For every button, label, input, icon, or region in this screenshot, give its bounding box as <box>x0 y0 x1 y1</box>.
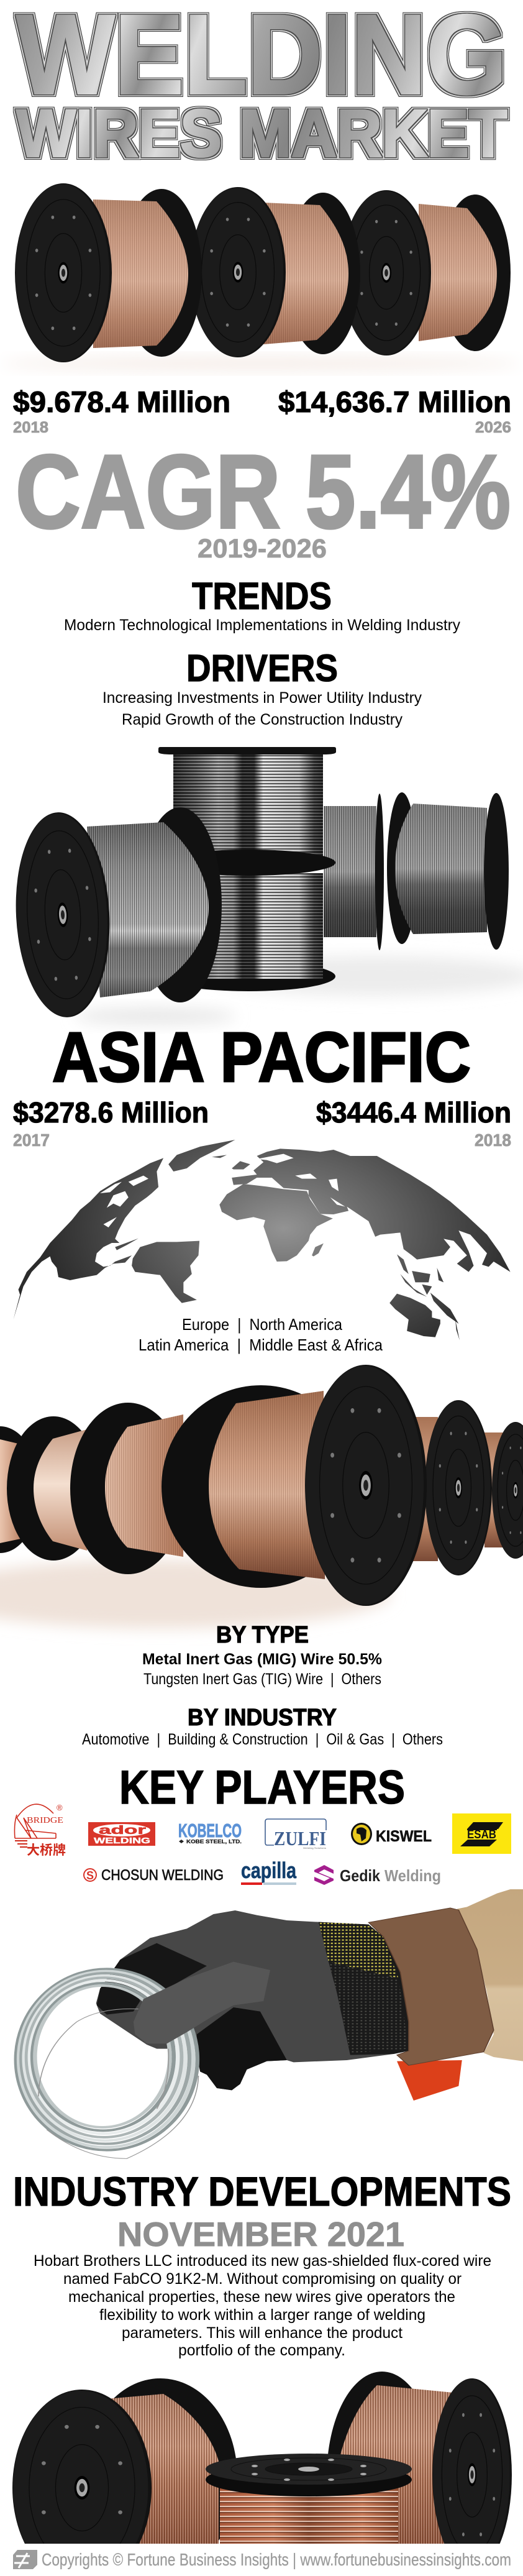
africa <box>219 1184 333 1262</box>
other regions line 2: Latin America | Middle East & Africa <box>139 1336 383 1354</box>
logo: gedik welding <box>314 1865 441 1885</box>
stat: 2026 market value: $14,636.7 Million <box>278 385 511 418</box>
stat: 2018 market value: $9.678.4 Million <box>13 385 230 418</box>
development description: Hobart Brothers LLC introduced its new gas-shielded flux-cored wire <box>34 2252 491 2270</box>
cuff <box>368 1908 494 2065</box>
trends text: Modern Technological Implementations in Welding Industry <box>64 616 460 634</box>
logo: esab <box>452 1813 511 1854</box>
year 2018: 2018 <box>13 419 48 436</box>
logo: chosun welding: S <box>86 1869 94 1882</box>
other regions <box>139 1315 383 1354</box>
far left spool <box>0 1426 40 1553</box>
spool 2 <box>190 187 360 357</box>
logo: zulfi <box>265 1819 326 1849</box>
by industry section: BY INDUSTRY <box>188 1705 337 1731</box>
logo: ador welding: WELDING <box>94 1836 150 1845</box>
spool 3 <box>342 190 511 355</box>
eurasia <box>232 1148 511 1272</box>
development description: flexibility to work within a larger range of welding <box>99 2306 425 2324</box>
sleeve <box>457 1889 523 2061</box>
driver 1: Increasing Investments in Power Utility Industry <box>102 689 422 707</box>
inland seas <box>257 1154 345 1207</box>
development description: portfolio of the company. <box>178 2342 345 2359</box>
lower fingers <box>197 2007 287 2090</box>
image: three copper wire spools <box>0 183 522 370</box>
logo: bridge: BRIDGE <box>27 1816 63 1825</box>
upright spool upper <box>158 747 336 876</box>
logo: gedik welding: Welding <box>384 1866 441 1885</box>
southeast asia <box>397 1254 460 1341</box>
image: three copper spools cropped <box>12 2372 512 2544</box>
logo: ador welding: ador <box>99 1824 147 1837</box>
footer logo <box>13 2550 37 2569</box>
logo: kiswel <box>351 1823 432 1845</box>
glove <box>96 1910 409 2090</box>
logo: bridge: ® <box>57 1803 63 1812</box>
logo: bridge: 大桥牌 <box>27 1843 66 1858</box>
logo: kobelco <box>178 1820 242 1845</box>
central america <box>115 1239 139 1250</box>
yellow dotted knit <box>319 1922 399 1978</box>
logo: kobelco: KOBELCO <box>178 1820 242 1841</box>
drivers section: DRIVERS <box>186 647 338 689</box>
other types: Tungsten Inert Gas (TIG) Wire | Others <box>143 1671 381 1688</box>
industries: Automotive | Building & Construction | Oil & Gas | Others <box>82 1731 443 1748</box>
main spool <box>161 1365 427 1606</box>
back finger shadow <box>97 1943 207 2015</box>
other regions: Europe | North America <box>182 1315 342 1334</box>
logo: chosun welding: CHOSUN WELDING <box>101 1867 224 1884</box>
second spool <box>70 1403 186 1574</box>
logo: kobelco: KOBE STEEL, LTD. <box>186 1839 242 1845</box>
development description: mechanical properties, these new wires give operators the <box>68 2288 455 2306</box>
stat: 2018 asia pacific value <box>316 1096 511 1150</box>
trends section <box>64 575 460 634</box>
left spool <box>12 2378 237 2576</box>
by type section <box>142 1622 382 1688</box>
logo: zulfi: Welding Solutions <box>303 1846 326 1849</box>
image: gloved hand holding wire coil <box>16 1889 523 2158</box>
stat: 2026 market value <box>278 385 511 436</box>
development description: parameters. This will enhance the product <box>122 2324 402 2342</box>
logo: gedik welding: Gedik <box>340 1866 380 1885</box>
logo: ador welding <box>88 1822 155 1846</box>
grey dotted knit <box>329 1962 409 2053</box>
left spool <box>11 807 222 1020</box>
british isles <box>232 1161 250 1170</box>
thumb <box>134 1962 270 2043</box>
development date: NOVEMBER 2021 <box>117 2215 404 2253</box>
stat: 2017 asia pacific value <box>13 1096 209 1150</box>
far right spools <box>413 1400 523 1575</box>
cagr period: 2019-2026 <box>198 534 327 564</box>
trends section: TRENDS <box>192 575 332 617</box>
logo: capilla: capilla <box>241 1858 297 1883</box>
logo: esab: ESAB <box>467 1828 496 1841</box>
year 2026: 2026 <box>475 419 511 436</box>
development description <box>34 2252 491 2359</box>
north america <box>13 1158 163 1319</box>
knit wrist <box>319 1922 409 2055</box>
logo: kiswel: KISWEL <box>376 1828 432 1845</box>
stat: 2018 market value <box>13 385 230 436</box>
region heading: asia pacific: ASIA PACIFIC <box>52 1018 471 1096</box>
right spool <box>387 792 509 950</box>
year 2018: 2018 <box>475 1130 511 1150</box>
hudson bay and lakes <box>100 1176 148 1227</box>
wire coil <box>16 1969 199 2158</box>
world map <box>13 1140 511 1341</box>
logo: bridge <box>14 1803 66 1858</box>
stat: 2018 asia pacific value: $3446.4 Million <box>316 1096 511 1129</box>
third spool <box>7 1416 100 1561</box>
key players heading: KEY PLAYERS <box>119 1761 405 1814</box>
greenland <box>168 1140 235 1171</box>
driver 2: Rapid Growth of the Construction Industry <box>122 711 402 728</box>
by industry section <box>82 1705 443 1748</box>
logo: zulfi: ZULFI <box>274 1827 326 1849</box>
stat: 2017 asia pacific value: $3278.6 Million <box>13 1096 209 1129</box>
back spool <box>324 794 384 950</box>
red tab <box>397 2060 462 2101</box>
leading type: Metal Inert Gas (MIG) Wire 50.5% <box>142 1651 382 1668</box>
upright spool lower <box>161 873 335 991</box>
image: silver wire spools <box>11 747 523 1025</box>
by type section: BY TYPE <box>216 1622 309 1648</box>
year 2017: 2017 <box>13 1130 50 1150</box>
spool 1 <box>15 183 202 362</box>
title <box>16 0 507 170</box>
iceland <box>212 1155 227 1158</box>
australia <box>389 1294 440 1337</box>
right spool <box>327 2372 512 2576</box>
drivers section <box>102 647 422 728</box>
south america <box>132 1241 199 1303</box>
madagascar <box>312 1244 324 1257</box>
upright spool <box>206 2454 412 2545</box>
development description: named FabCO 91K2-M. Without compromising on quality or <box>63 2270 462 2288</box>
image: copper spools in perspective <box>0 1365 523 1628</box>
